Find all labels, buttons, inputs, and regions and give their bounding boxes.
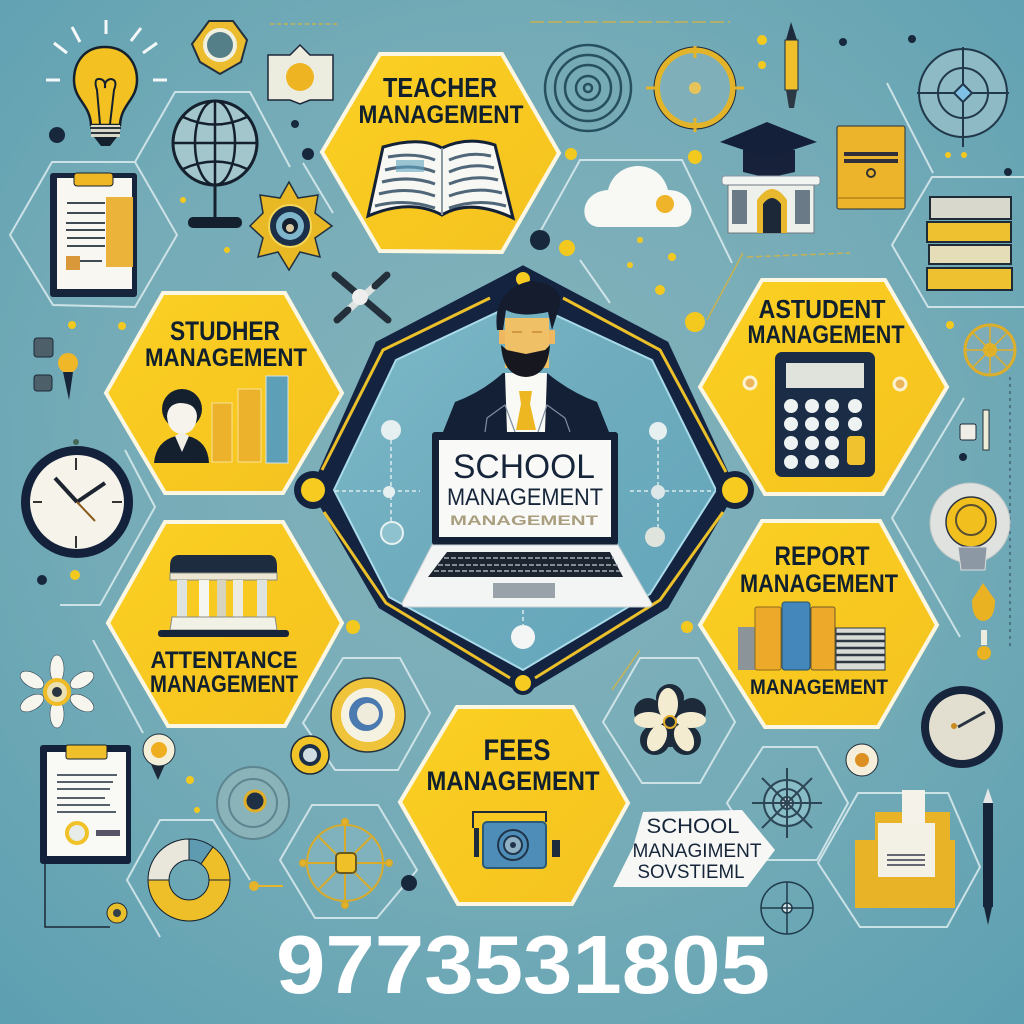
connector nodes [294,272,754,693]
heading: attendance management: MANAGEMENT [150,671,298,698]
heading: fees management: FEES [484,734,550,767]
laptop screen text: MANAGEMENT [450,512,599,528]
icon: wall clock [21,439,133,558]
icon: seal badge [930,483,1010,570]
heading: attendance management [150,647,298,698]
icon: small medallion [143,734,175,780]
icon: yellow folder [837,126,905,209]
icon: small key [249,881,283,891]
icon: pressure gauge [921,686,1003,768]
icon: gear ring top [192,21,247,74]
hexagon: astudent management [700,280,947,494]
icon: network polyhedron [300,819,392,908]
icon: cloud [584,166,691,227]
laptop screen text: SCHOOL [453,448,595,486]
icon: person with bars [154,376,288,463]
icon: calculator [775,352,875,477]
icon: small gold ring 2 [291,736,329,774]
icon: small note card [268,45,333,104]
callout: school management system: MANAGIMENT [632,841,762,862]
icon: crossed tools [335,275,388,320]
heading: astudent management: ASTUDENT [758,294,886,324]
laptop screen text [447,448,603,528]
heading: report management [740,541,898,598]
heading: report management: MANAGEMENT [740,570,898,598]
heading: studher management: MANAGEMENT [145,344,307,372]
icon: dark flower [634,684,706,755]
icon: clipboard bottom left [40,745,131,927]
heading: teacher management [358,72,524,129]
icon: small spiral squares [34,338,53,391]
heading: fees management: MANAGEMENT [426,766,600,796]
heading: fees management [426,734,600,796]
icon: flower left [17,655,97,728]
heading: attendance management: ATTENTANCE [150,647,298,674]
heading: astudent management: MANAGEMENT [748,321,904,349]
heading: astudent management [748,294,904,349]
decorative dashes [270,22,1010,690]
icon: helm wheel [752,768,822,838]
icon: gold target ring [646,46,744,132]
icon: light bulb [46,20,167,146]
icon: stacked books [927,197,1012,290]
hexagon: report management [700,521,937,727]
icon: small bulb badge [846,744,878,776]
icon: gold bird [58,353,78,400]
icon: glass globe gear [217,767,289,839]
icon: radar compass [917,47,1009,147]
icon: concentric circles [545,45,631,131]
hexagon: attendance management [108,522,342,726]
callout: school management system: SCHOOL [646,815,740,838]
icon: globe on stand [173,101,257,228]
icon: open book [368,141,513,218]
icon: folder with papers [855,790,955,908]
icon: columned building [158,555,289,637]
phone number: 9773531805 [276,918,770,1011]
callout: school management system [613,810,775,887]
icon: fees device [473,812,560,868]
icon: pencil [785,22,798,108]
hexagon: fees management [400,707,628,904]
subheading: management: MANAGEMENT [750,676,888,699]
hexagon: teacher management [322,54,559,252]
icon: gold ring [331,678,405,752]
icon: clipboard left [50,173,137,297]
icon: small white square and bar [960,410,989,450]
heading: report management: REPORT [774,541,870,571]
heading: studher management: STUDHER [170,316,280,346]
heading: teacher management: TEACHER [383,72,497,103]
icon: small target [761,882,813,934]
icon: gear right [965,325,1015,375]
icon: sunburst badge [250,182,332,270]
heading: teacher management: MANAGEMENT [358,101,524,129]
scattered dots [68,35,967,813]
icon: tall pin [972,583,995,660]
icon: binders and books [738,602,885,670]
icon: laptop [402,432,652,607]
laptop screen text: MANAGEMENT [447,484,603,511]
panel: central octagon [294,267,754,693]
hexagon: studher management [106,293,342,493]
icon: man in suit [443,281,609,432]
callout: school management system: SOVSTIEML [638,862,744,883]
heading: studher management [145,316,307,372]
icon: pie ring [148,839,230,921]
decorative gold inner line [322,298,726,678]
icon: graduation building [720,122,820,233]
icon: small gold ring [107,903,127,923]
icon: pen right [983,788,993,925]
